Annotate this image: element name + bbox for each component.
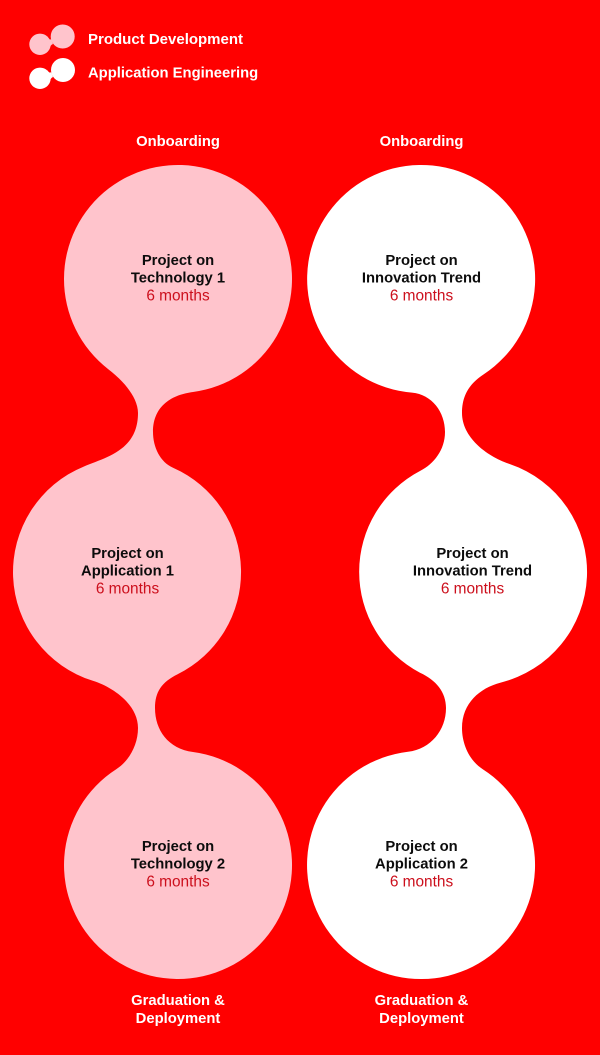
text: project on innovation trend middle	[413, 546, 532, 598]
text: project on technology 1: 6 months	[146, 288, 210, 304]
footer: graduation and deployment left	[131, 993, 225, 1027]
text: project on technology 2: 6 months	[146, 874, 210, 890]
text: project on innovation trend top: Project on	[385, 253, 458, 269]
footer: graduation and deployment right	[375, 993, 469, 1027]
text: project on application 1	[81, 546, 174, 598]
icon: application engineering blobs	[29, 58, 75, 89]
text: project on technology 1	[131, 253, 225, 304]
text: project on innovation trend top: 6 months	[390, 288, 453, 304]
panel: product development path shape	[13, 165, 292, 979]
text: project on innovation trend middle: Project on	[436, 546, 509, 562]
legend label: product development: Product Development	[88, 31, 243, 48]
heading: onboarding right: Onboarding	[380, 134, 463, 150]
text: project on innovation trend top: Innovation Trend	[362, 270, 481, 286]
legend label: application engineering: Application Engineering	[88, 66, 258, 82]
text: project on technology 1: Project on	[142, 253, 214, 269]
text: project on application 1: Application 1	[81, 564, 174, 580]
heading: onboarding left: Onboarding	[136, 134, 220, 150]
footer: graduation and deployment left: Deployment	[136, 1011, 220, 1027]
text: project on technology 2: Project on	[142, 839, 214, 855]
footer: graduation and deployment left: Graduation &	[131, 993, 225, 1009]
text: project on application 2: 6 months	[390, 874, 453, 890]
text: project on innovation trend middle: Innovation Trend	[413, 564, 532, 580]
text: project on application 2: Application 2	[375, 856, 468, 872]
text: project on technology 2: Technology 2	[131, 856, 225, 872]
text: project on innovation trend top	[362, 253, 481, 304]
legend	[29, 24, 258, 89]
text: project on application 2: Project on	[385, 839, 458, 855]
panel: application engineering path shape	[307, 165, 587, 979]
text: project on application 2	[375, 839, 468, 890]
text: project on technology 1: Technology 1	[131, 270, 225, 286]
text: project on technology 2	[131, 839, 225, 890]
footer: graduation and deployment right: Deployment	[379, 1011, 464, 1027]
footer: graduation and deployment right: Graduation &	[375, 993, 469, 1009]
text: project on application 1: 6 months	[96, 580, 159, 598]
text: project on innovation trend middle: 6 months	[441, 580, 504, 598]
icon: product development blobs	[29, 24, 75, 55]
text: project on application 1: Project on	[91, 546, 164, 562]
